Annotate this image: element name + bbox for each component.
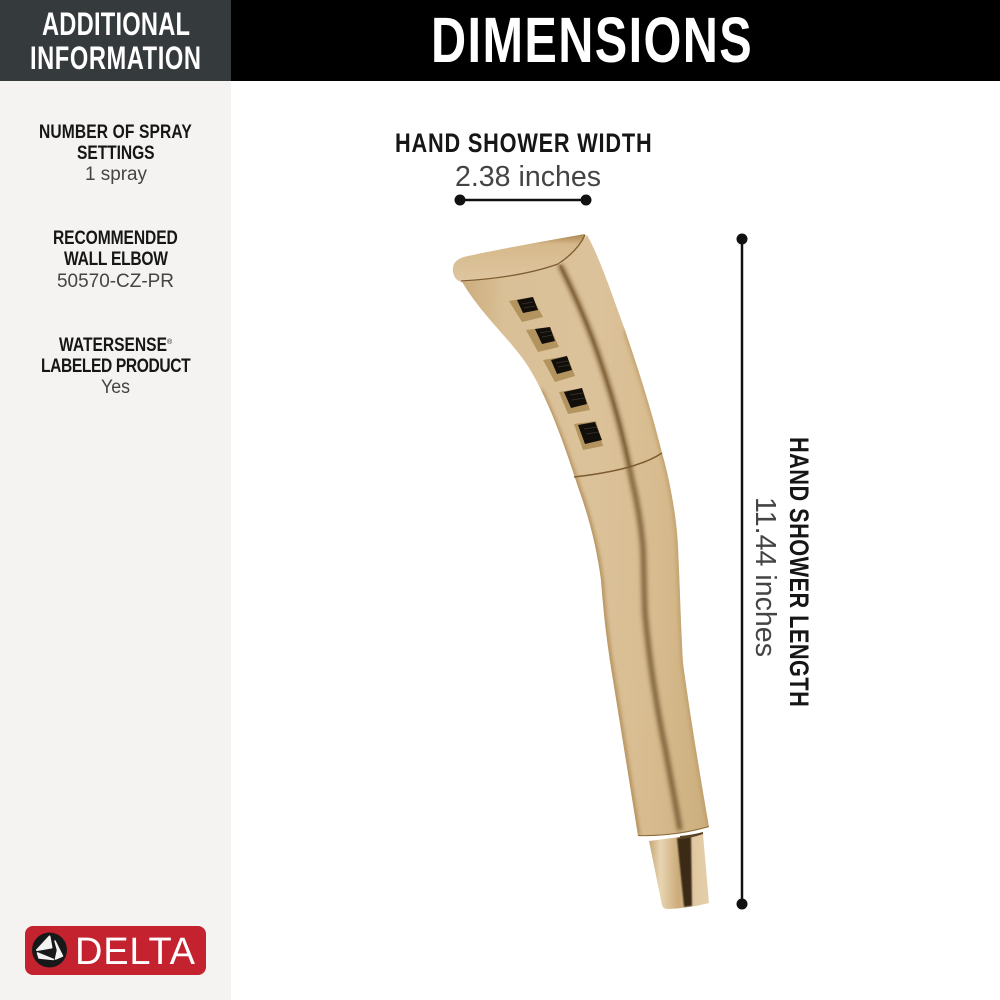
logo: Delta: [25, 926, 206, 975]
width dimension: 2.38 inches: [455, 161, 601, 193]
info: recommended wall elbow: [53, 226, 178, 292]
info: watersense labeled product: ®: [167, 338, 173, 346]
collar gap: [680, 832, 703, 839]
info: recommended wall elbow: 50570-CZ-PR: [57, 271, 174, 292]
product: hand shower: [453, 230, 715, 915]
handle body: [455, 230, 715, 845]
head top face: [453, 234, 585, 282]
joint seam: [574, 453, 662, 477]
width dimension: [395, 129, 652, 206]
sidebar header: [0, 0, 231, 81]
title banner: DIMENSIONS: [431, 6, 752, 77]
collar: [649, 834, 709, 909]
info: number of spray settings: [39, 120, 192, 185]
ridge shadow: [560, 265, 680, 830]
info: recommended wall elbow: RECOMMENDED: [53, 226, 178, 248]
info: watersense labeled product: [41, 333, 191, 398]
logo: Delta: DELTA: [75, 931, 196, 973]
info: number of spray settings: 1 spray: [85, 164, 147, 185]
right edge shading: [625, 330, 709, 827]
spray nozzles: [509, 297, 603, 450]
left edge shading: [540, 390, 638, 836]
sidebar header: ADDITIONAL: [42, 7, 190, 42]
info: recommended wall elbow: WALL ELBOW: [64, 247, 168, 269]
title banner: [231, 0, 1000, 81]
info: watersense labeled product: LABELED PRODUCT: [41, 354, 191, 376]
info: number of spray settings: NUMBER OF SPRAY: [39, 120, 192, 142]
length dimension: HAND SHOWER LENGTH: [783, 437, 813, 707]
sidebar panel: [0, 81, 231, 1000]
length dimension: [736, 234, 813, 910]
length dimension: 11.44 inches: [749, 497, 781, 657]
width dimension: HAND SHOWER WIDTH: [395, 129, 652, 159]
info: number of spray settings: SETTINGS: [77, 141, 155, 163]
info: watersense labeled product: WATERSENSE: [59, 333, 167, 355]
sidebar header: INFORMATION: [30, 41, 201, 76]
lower shadow band: [638, 827, 709, 836]
info: watersense labeled product: Yes: [101, 377, 130, 398]
head edges: [461, 235, 585, 281]
